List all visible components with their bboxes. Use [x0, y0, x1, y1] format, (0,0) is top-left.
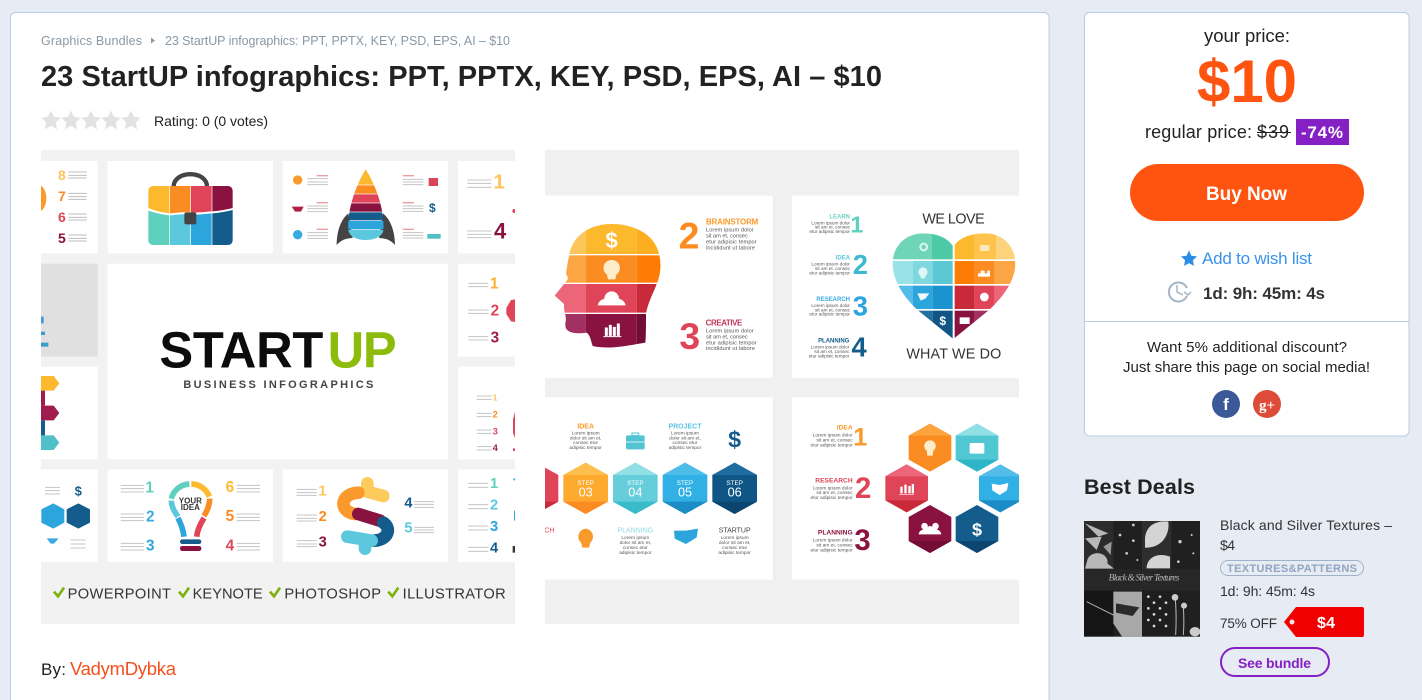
list: idea research planning: Lorem ipsum dolor [813, 537, 853, 543]
startup logo: BUSINESS INFOGRAPHICS [183, 379, 373, 391]
deal: black and silver textures [1084, 517, 1392, 676]
list: idea research planning: sit am et, consec [816, 437, 853, 443]
share message: Want 5% additional discount? [1147, 339, 1347, 356]
tile: numbered list left: 7 [58, 188, 66, 204]
list: brainstorm and creative: Lorem ipsum dolor [706, 228, 754, 234]
title: 23 StartUP infographics: PPT, PPTX, KEY, PSD, EPS, AI – $10 [41, 61, 882, 93]
step hexagons: STEP [627, 480, 644, 487]
bulb numbered lists: 2 [146, 509, 155, 526]
tile: research list right: 1 [493, 393, 498, 403]
breadcrumb: 23 StartUP infographics: PPT, PPTX, KEY, PSD, EPS, AI – $10 [165, 34, 510, 48]
list: learn idea research planning: Lorem ipsum dolor [811, 303, 850, 308]
tile: hex steps fragment [41, 484, 90, 548]
discount badge [1296, 119, 1349, 145]
share message: Just share this page on social media! [1123, 359, 1370, 376]
icon: facebook [1212, 390, 1240, 418]
software list [53, 586, 505, 598]
tile: research list right: 4 [493, 443, 499, 453]
list: learn idea research planning: sit am et, consec [815, 307, 851, 312]
hexagon ring [885, 424, 1022, 553]
step labels: adipisic tempor [569, 445, 602, 451]
price: $10 [1197, 48, 1297, 115]
list: idea research planning: sit am et, consec [816, 490, 853, 496]
bulb numbered lists: 5 [226, 508, 235, 525]
see bundle button: See bundle [1238, 655, 1311, 671]
step labels: consec etur [623, 545, 648, 551]
buy now button [1130, 164, 1364, 221]
list: learn idea research planning: sit am et, consec [815, 225, 851, 230]
list: learn idea research planning: sit am et, consec [815, 266, 851, 271]
hex arrows fragment [41, 376, 59, 450]
hexagon ring: $ [972, 520, 982, 540]
tile: numbered list left: 6 [58, 209, 66, 225]
tile: numbered list bottom right: 4 [490, 540, 499, 556]
list: idea research planning: 3 [854, 524, 871, 557]
list: brainstorm and creative: CREATIVE [706, 318, 743, 327]
list: idea research planning: Lorem ipsum dolor [813, 485, 853, 491]
icon: puzzle dollar sign [343, 483, 388, 549]
list: learn idea research planning: RESEARCH [816, 297, 850, 303]
heart caption: WHAT WE DO [906, 346, 1001, 362]
bulb numbered lists: 4 [226, 538, 235, 555]
step hexagons: STEP [726, 480, 743, 487]
icon: rocket [337, 167, 395, 245]
step labels: consec etur [722, 545, 748, 551]
list: brainstorm and creative: 2 [679, 215, 699, 257]
list: idea research planning: 1 [853, 423, 867, 451]
dollar numbered lists: 2 [319, 509, 327, 525]
step hexagons: 05 [678, 486, 692, 500]
bulb numbered lists: 6 [226, 479, 234, 496]
deal countdown: 1d: 9h: 45m: 4s [1220, 583, 1315, 599]
step hexagons: 06 [728, 486, 742, 500]
icon: segmented head [554, 224, 660, 348]
author line: VadymDybka [70, 658, 177, 679]
icon: light bulb: IDEA [181, 503, 200, 512]
rating text: Rating: 0 (0 votes) [154, 113, 268, 129]
tile: research list right: 2 [491, 303, 499, 320]
icon: segmented head: $ [606, 228, 618, 253]
software list: PHOTOSHOP [284, 586, 381, 602]
tile: research list right: 3 [493, 426, 498, 436]
icon: clock [1169, 283, 1191, 302]
wish list link: Add to wish list [1202, 249, 1312, 268]
deal thumbnail: Black & Silver Textures [1109, 574, 1180, 584]
tile: numbered list bottom right: 1 [490, 476, 498, 492]
see bundle button [1221, 648, 1329, 676]
dollar numbered lists: 5 [404, 521, 412, 537]
deal title [1220, 517, 1392, 553]
step hexagons: STEP [677, 480, 693, 487]
list: brainstorm and creative: 3 [679, 315, 700, 357]
step labels: consec etur [573, 440, 599, 446]
list: learn idea research planning: etur adipisic tempor [809, 229, 850, 234]
bulb numbered lists: 3 [146, 538, 155, 555]
list: idea research planning: sit am et, consec [816, 542, 853, 548]
step labels: CH [544, 528, 554, 535]
list: learn idea research planning: 2 [853, 249, 868, 280]
step hexagons: 04 [628, 486, 642, 500]
icon: segmented heart [890, 230, 1016, 341]
list: learn idea research planning: PLANNING [818, 338, 850, 344]
list: idea research planning: etur adipisic tempor [811, 495, 853, 501]
list: idea research planning: etur adipisic tempor [811, 547, 853, 553]
list: learn idea research planning: Lorem ipsum dolor [811, 262, 850, 267]
step hexagons: STEP [577, 480, 594, 487]
step labels: dolor sit am et, [570, 435, 602, 441]
startup logo [160, 332, 395, 388]
list: learn idea research planning: LEARN [829, 214, 850, 220]
startup logo: UP [328, 322, 397, 379]
price tag: $4 [1317, 615, 1335, 632]
share message [1123, 339, 1370, 376]
panel: pricing [1084, 12, 1409, 436]
tile: numbered list top right: 4 [494, 219, 507, 244]
tile: hex steps fragment: $ [75, 484, 82, 498]
list: learn idea research planning: sit am et, consec [814, 349, 850, 354]
dollar numbered lists: 1 [318, 483, 326, 499]
list: learn idea research planning: 4 [851, 332, 867, 363]
list: brainstorm and creative: incididunt ut labore [706, 346, 755, 352]
rocket side icons and text [292, 175, 441, 239]
tile: research list right: 2 [493, 410, 498, 420]
step labels [544, 423, 751, 556]
collage tiles [41, 161, 515, 562]
list: brainstorm and creative: sit am et, consec [706, 234, 748, 240]
list: idea research planning [811, 423, 871, 557]
step labels: Lorem ipsum [621, 535, 649, 541]
step labels: consec etur [673, 440, 698, 446]
step hexagons [545, 462, 757, 514]
dollar numbered lists: 4 [404, 495, 413, 511]
bulb numbered lists: 1 [145, 480, 154, 497]
best deals heading: Best Deals [1084, 475, 1195, 499]
breadcrumb: Graphics Bundles [41, 34, 142, 48]
tile: numbered list bottom right [468, 476, 515, 556]
step labels: Lorem ipsum [572, 430, 600, 436]
step hexagons: 03 [579, 486, 593, 500]
dollar numbered lists [297, 483, 434, 551]
countdown: 1d: 9h: 45m: 4s [1203, 284, 1325, 303]
list: brainstorm and creative: Lorem ipsum dolor [706, 329, 754, 335]
step labels: dolor sit am et, [619, 540, 651, 546]
list: learn idea research planning: Lorem ipsum dolor [811, 220, 850, 225]
step labels: adipisic tempor [619, 550, 652, 556]
rocket side icons and text: $ [429, 201, 436, 215]
category tag: TEXTURES&PATTERNS [1227, 563, 1357, 575]
step labels: PLANNING [617, 528, 653, 535]
rating stars [41, 110, 141, 129]
list: idea research planning: 2 [855, 472, 871, 505]
regular price: regular price: [1145, 122, 1252, 142]
discount label: 75% OFF [1220, 616, 1277, 631]
product image: infographic examples [514, 150, 1022, 624]
step labels: adipisic tempor [718, 550, 751, 556]
list: learn idea research planning: Lorem ipsum dolor [811, 345, 850, 350]
bulb numbered lists [121, 479, 260, 555]
regular price: $39 [1257, 122, 1289, 142]
tile: numbered list top right: 1 [493, 170, 505, 193]
list: learn idea research planning [809, 212, 868, 363]
list: learn idea research planning: 1 [850, 212, 863, 238]
list: idea research planning: Lorem ipsum dolor [813, 432, 853, 438]
list: brainstorm and creative: sit am et, consec [706, 335, 748, 341]
tile: numbered list bottom right: 3 [490, 519, 498, 535]
list: brainstorm and creative: etur adipisic tempor [706, 240, 757, 246]
list: learn idea research planning: 3 [853, 290, 868, 321]
list: idea research planning: etur adipisic tempor [811, 442, 853, 448]
step labels: Lorem ipsum [671, 430, 699, 436]
tile: research list right: 3 [491, 329, 499, 346]
icon: segmented heart: $ [939, 314, 946, 328]
step icons [578, 426, 741, 548]
step labels: PROJECT [668, 423, 702, 430]
tile: numbered list top right [467, 174, 515, 238]
list: brainstorm and creative [679, 215, 759, 357]
step labels: adipisic tempor [669, 445, 702, 451]
list: learn idea research planning: etur adipisic tempor [809, 353, 850, 358]
list: learn idea research planning: IDEA [836, 255, 851, 261]
list: idea research planning: PLANNING [818, 530, 853, 537]
grey tile fragment [41, 317, 48, 347]
icon: facebook: f [1223, 395, 1229, 414]
deal title: $4 [1220, 537, 1235, 553]
tile: research list right: 1 [490, 276, 499, 293]
step labels: Lorem ipsum [721, 535, 749, 541]
buy now button: Buy Now [1206, 184, 1287, 205]
software list: ILLUSTRATOR [403, 586, 506, 602]
step labels: IDEA [577, 423, 594, 430]
step labels: dolor sit am et, [669, 435, 701, 441]
tile: numbered list left: 8 [58, 167, 66, 183]
product image: startup collage [30, 150, 516, 624]
list: learn idea research planning: etur adipisic tempor [809, 312, 850, 317]
icon: google plus [1253, 390, 1281, 418]
list: brainstorm and creative: BRAINSTORM [706, 218, 759, 227]
tile: research list right [468, 276, 515, 453]
deal title: Black and Silver Textures – [1220, 517, 1392, 533]
step labels: STARTUP [719, 528, 751, 535]
tile: numbered list left [41, 170, 87, 243]
icon: light bulb [171, 484, 210, 551]
list: brainstorm and creative: etur adipisic tempor [706, 341, 757, 347]
heart heading: WE LOVE [922, 212, 985, 228]
list: learn idea research planning: etur adipisic tempor [809, 270, 850, 275]
dollar numbered lists: 3 [319, 535, 327, 551]
icon: briefcase [148, 174, 233, 245]
list: idea research planning: RESEARCH [815, 477, 853, 484]
discount badge: -74% [1301, 123, 1343, 142]
author line: By: [41, 660, 66, 679]
startup logo: START [159, 322, 323, 379]
deal thumbnail [1084, 521, 1200, 637]
step labels: dolor sit am et, [719, 540, 751, 546]
list: brainstorm and creative: incididunt ut labore [706, 245, 755, 251]
example tiles [545, 196, 1019, 580]
panel: product details [10, 12, 1049, 700]
icon: google plus: g+ [1259, 398, 1275, 414]
software list: KEYNOTE [193, 586, 263, 602]
price tag [1284, 607, 1364, 637]
your price label: your price: [1204, 25, 1290, 46]
software list: POWERPOINT [68, 586, 171, 602]
icon: light bulb: YOUR [179, 496, 202, 505]
step icons: $ [728, 426, 741, 452]
tile: numbered list left: 5 [58, 230, 66, 246]
list: idea research planning: IDEA [837, 425, 853, 432]
tile: numbered list bottom right: 2 [490, 497, 498, 513]
